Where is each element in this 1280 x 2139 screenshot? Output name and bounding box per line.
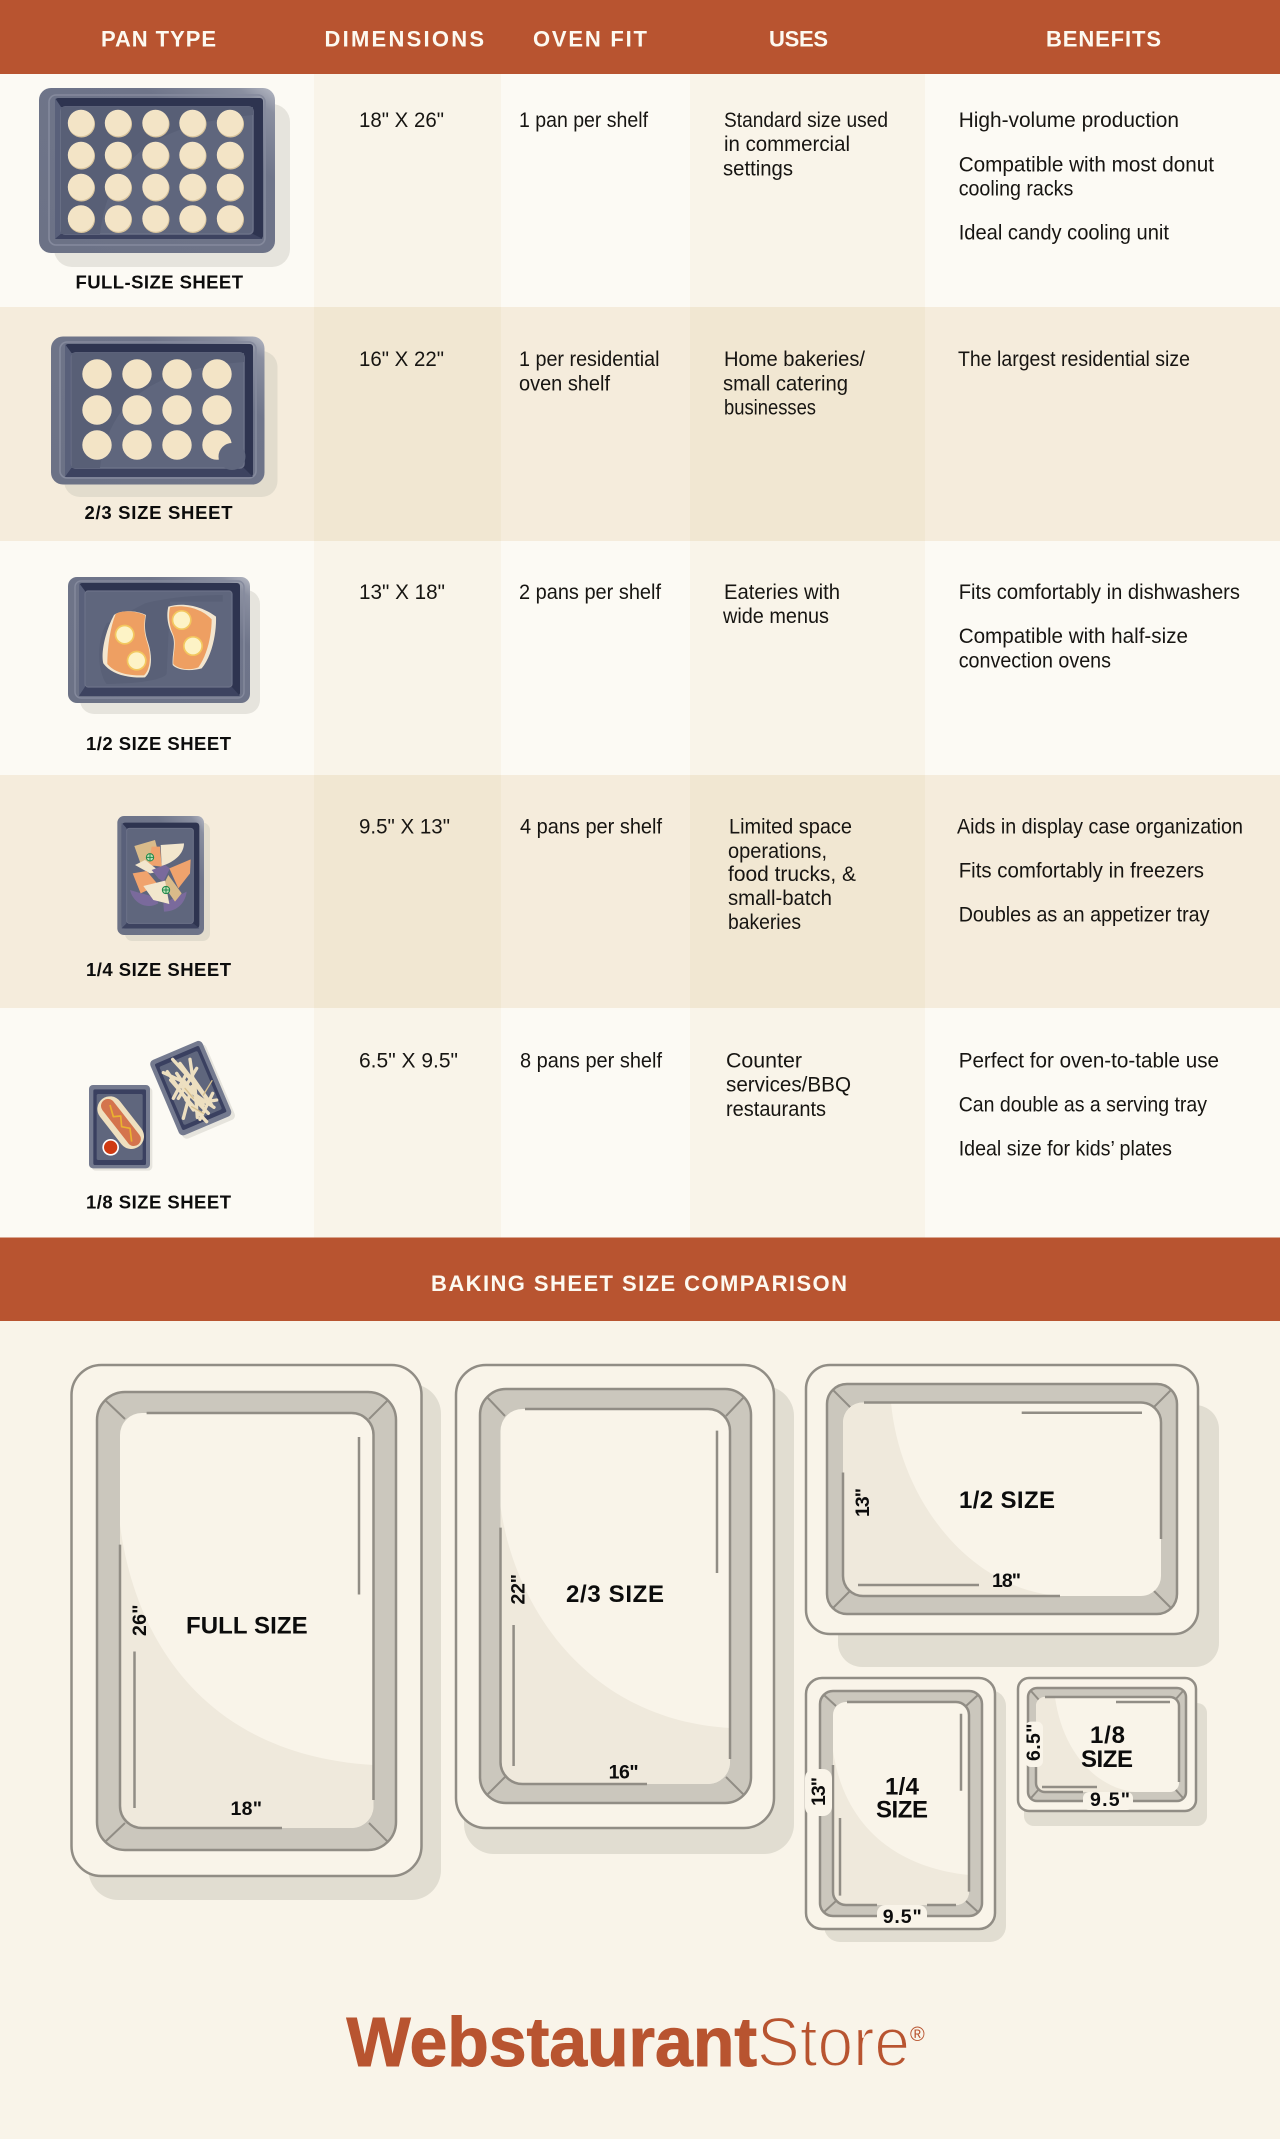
text: 1/4 oven fit: 4 pans per shelf xyxy=(520,815,662,838)
text: 1/8 benefits: Ideal size for kids’ plates xyxy=(959,1137,1172,1160)
diagram: 2/3 size tray xyxy=(456,1365,794,1854)
text: full-size benefits xyxy=(959,109,1214,244)
text: 1/2 uses xyxy=(722,581,840,628)
text: 1/4 uses xyxy=(728,815,856,934)
header bar: table column headings: DIMENSIONS xyxy=(324,26,484,52)
text: 2/3 uses: Home bakeries/ xyxy=(724,348,865,371)
icon: 2/3 size pan with dough balls xyxy=(51,336,278,497)
text: 2/3 uses: small catering xyxy=(723,373,848,396)
text: 1/4 dimensions: 9.5" X 13" xyxy=(359,815,450,838)
text: 2/3 oven fit xyxy=(519,348,660,396)
panel: 2/3 size sheet row xyxy=(0,307,1280,541)
label: 2/3 size sheet: 2/3 SIZE SHEET xyxy=(84,502,233,523)
text: 1/8 dimensions: 6.5" X 9.5" xyxy=(359,1049,458,1072)
icon: 1/2 size pan with flatbreads xyxy=(68,577,260,714)
text: 1/2 oven fit: 2 pans per shelf xyxy=(519,581,661,604)
text: full-size benefits: Ideal candy cooling unit xyxy=(959,222,1169,244)
panel: 1/4 size sheet row xyxy=(0,775,1280,1008)
text: full-size uses: Standard size used xyxy=(724,109,888,132)
text: full-size uses xyxy=(723,109,888,180)
hot dog pan xyxy=(89,1085,152,1171)
dimension: 13 inch: 13" xyxy=(808,1777,830,1806)
text: 1/4 benefits: Doubles as an appetizer tray xyxy=(959,903,1210,926)
text: 1/4 benefits: Fits comfortably in freezers xyxy=(959,860,1204,883)
text: 1/4 uses: small-batch xyxy=(728,887,832,910)
dimension: 26 inch: 26" xyxy=(129,1604,151,1636)
flatbread left xyxy=(103,611,151,677)
text: 2/3 oven fit: oven shelf xyxy=(519,373,610,396)
header bar: table column headings xyxy=(0,0,1280,74)
dimension: 13 inch: 13" xyxy=(852,1488,874,1517)
text: 1/8 benefits xyxy=(959,1049,1219,1160)
text: 1/2 dimensions: 13" X 18" xyxy=(359,581,445,604)
text: full-size benefits: High-volume production xyxy=(959,109,1179,132)
diagram: 1/8 size tray xyxy=(1018,1678,1207,1826)
label: 1/4 size: SIZE xyxy=(876,1797,928,1824)
text: 2/3 uses: businesses xyxy=(724,397,816,420)
icon: full-size pan with dough balls xyxy=(39,88,290,267)
label: 1/2 size: 1/2 SIZE xyxy=(959,1487,1055,1514)
panel: 1/8 size sheet row xyxy=(0,1008,1280,1238)
text: 1/4 benefits: Aids in display case organization xyxy=(957,815,1243,838)
text: 1/2 benefits xyxy=(959,581,1240,673)
panel: 1/2 size sheet row xyxy=(0,541,1280,775)
logo: WebstaurantStore: ® xyxy=(910,2024,925,2046)
label: 1/4 size: 1/4 xyxy=(885,1774,920,1801)
text: full-size oven fit: 1 pan per shelf xyxy=(519,109,648,132)
dimension: 9.5 inch: 9.5" xyxy=(883,1906,922,1928)
text: 1/8 uses: restaurants xyxy=(726,1098,826,1121)
label: 1/8 size sheet: 1/8 SIZE SHEET xyxy=(86,1192,232,1213)
dimension: 18 inch: 18" xyxy=(992,1570,1021,1592)
label: 1/8 size: SIZE xyxy=(1081,1746,1133,1773)
dimension: 18 inch: 18" xyxy=(230,1798,262,1820)
label: 1/4 size xyxy=(876,1774,928,1824)
dimension: 9.5 inch: 9.5" xyxy=(1090,1789,1130,1811)
text: 2/3 oven fit: 1 per residential xyxy=(519,348,660,371)
text: 1/2 uses: wide menus xyxy=(722,605,829,628)
banner: baking sheet size comparison heading xyxy=(0,1238,1280,1321)
fries pan xyxy=(149,1039,236,1140)
text: 1/4 uses: bakeries xyxy=(728,911,801,934)
label: 1/8 size: 1/8 xyxy=(1090,1722,1125,1749)
text: full-size uses: settings xyxy=(723,158,793,180)
icon: 1/8 size pans with hot dog and fries xyxy=(89,1039,236,1171)
diagram: full size tray xyxy=(72,1365,441,1900)
text: 1/8 oven fit: 8 pans per shelf xyxy=(520,1049,662,1072)
header bar: table column headings: PAN TYPE xyxy=(101,26,216,52)
label: 2/3 size: 2/3 SIZE xyxy=(566,1581,664,1608)
dimension: 16 inch: 16" xyxy=(609,1761,639,1783)
label: full-size sheet: FULL-SIZE SHEET xyxy=(76,272,244,293)
text: full-size benefits: Compatible with most donut xyxy=(959,153,1214,176)
banner: baking sheet size comparison heading: BAKING SHEET SIZE COMPARISON xyxy=(431,1271,847,1296)
text: 2/3 dimensions: 16" X 22" xyxy=(359,348,444,371)
text: 1/8 uses xyxy=(726,1049,851,1121)
text: 1/2 benefits: Fits comfortably in dishwashers xyxy=(959,581,1240,604)
label: 1/4 size sheet: 1/4 SIZE SHEET xyxy=(86,959,232,980)
text: 1/2 benefits: convection ovens xyxy=(959,650,1111,673)
text: full-size dimensions: 18" X 26" xyxy=(359,109,444,132)
text: 2/3 benefits: The largest residential size xyxy=(958,348,1190,371)
text: 1/8 uses: Counter xyxy=(726,1049,802,1072)
text: 2/3 uses xyxy=(723,348,865,420)
label: full size: FULL SIZE xyxy=(186,1612,308,1639)
text: 1/4 uses: Limited space xyxy=(729,815,852,838)
header bar: table column headings: BENEFITS xyxy=(1046,26,1161,52)
logo: WebstaurantStore: Store xyxy=(757,2003,910,2081)
dimension: 6.5 inch: 6.5" xyxy=(1023,1724,1045,1761)
text: 1/4 uses: operations, xyxy=(728,840,827,863)
logo: WebstaurantStore: Webstaurant xyxy=(346,2003,757,2081)
dimension: 22 inch: 22" xyxy=(508,1574,530,1604)
label: 1/2 size sheet: 1/2 SIZE SHEET xyxy=(86,733,232,754)
text: full-size uses: in commercial xyxy=(724,133,850,156)
text: 1/2 uses: Eateries with xyxy=(724,581,840,604)
text: 1/4 uses: food trucks, & xyxy=(728,863,856,886)
panel: full-size sheet row xyxy=(0,74,1280,307)
header bar: table column headings: OVEN FIT xyxy=(533,26,648,52)
text: 1/8 benefits: Can double as a serving tray xyxy=(959,1094,1207,1117)
label: 1/8 size xyxy=(1081,1722,1133,1773)
flatbread right xyxy=(167,605,216,670)
text: 1/8 uses: services/BBQ xyxy=(726,1073,851,1096)
icon: 1/4 size pan with nachos xyxy=(117,816,210,941)
header bar: table column headings: USES xyxy=(769,26,828,52)
text: 1/4 benefits xyxy=(957,815,1243,926)
text: 1/2 benefits: Compatible with half-size xyxy=(959,625,1188,648)
text: full-size benefits: cooling racks xyxy=(959,178,1073,201)
diagram: 1/2 size tray xyxy=(806,1365,1219,1667)
diagram: 1/4 size tray xyxy=(805,1678,1006,1942)
text: 1/8 benefits: Perfect for oven-to-table use xyxy=(959,1049,1219,1072)
